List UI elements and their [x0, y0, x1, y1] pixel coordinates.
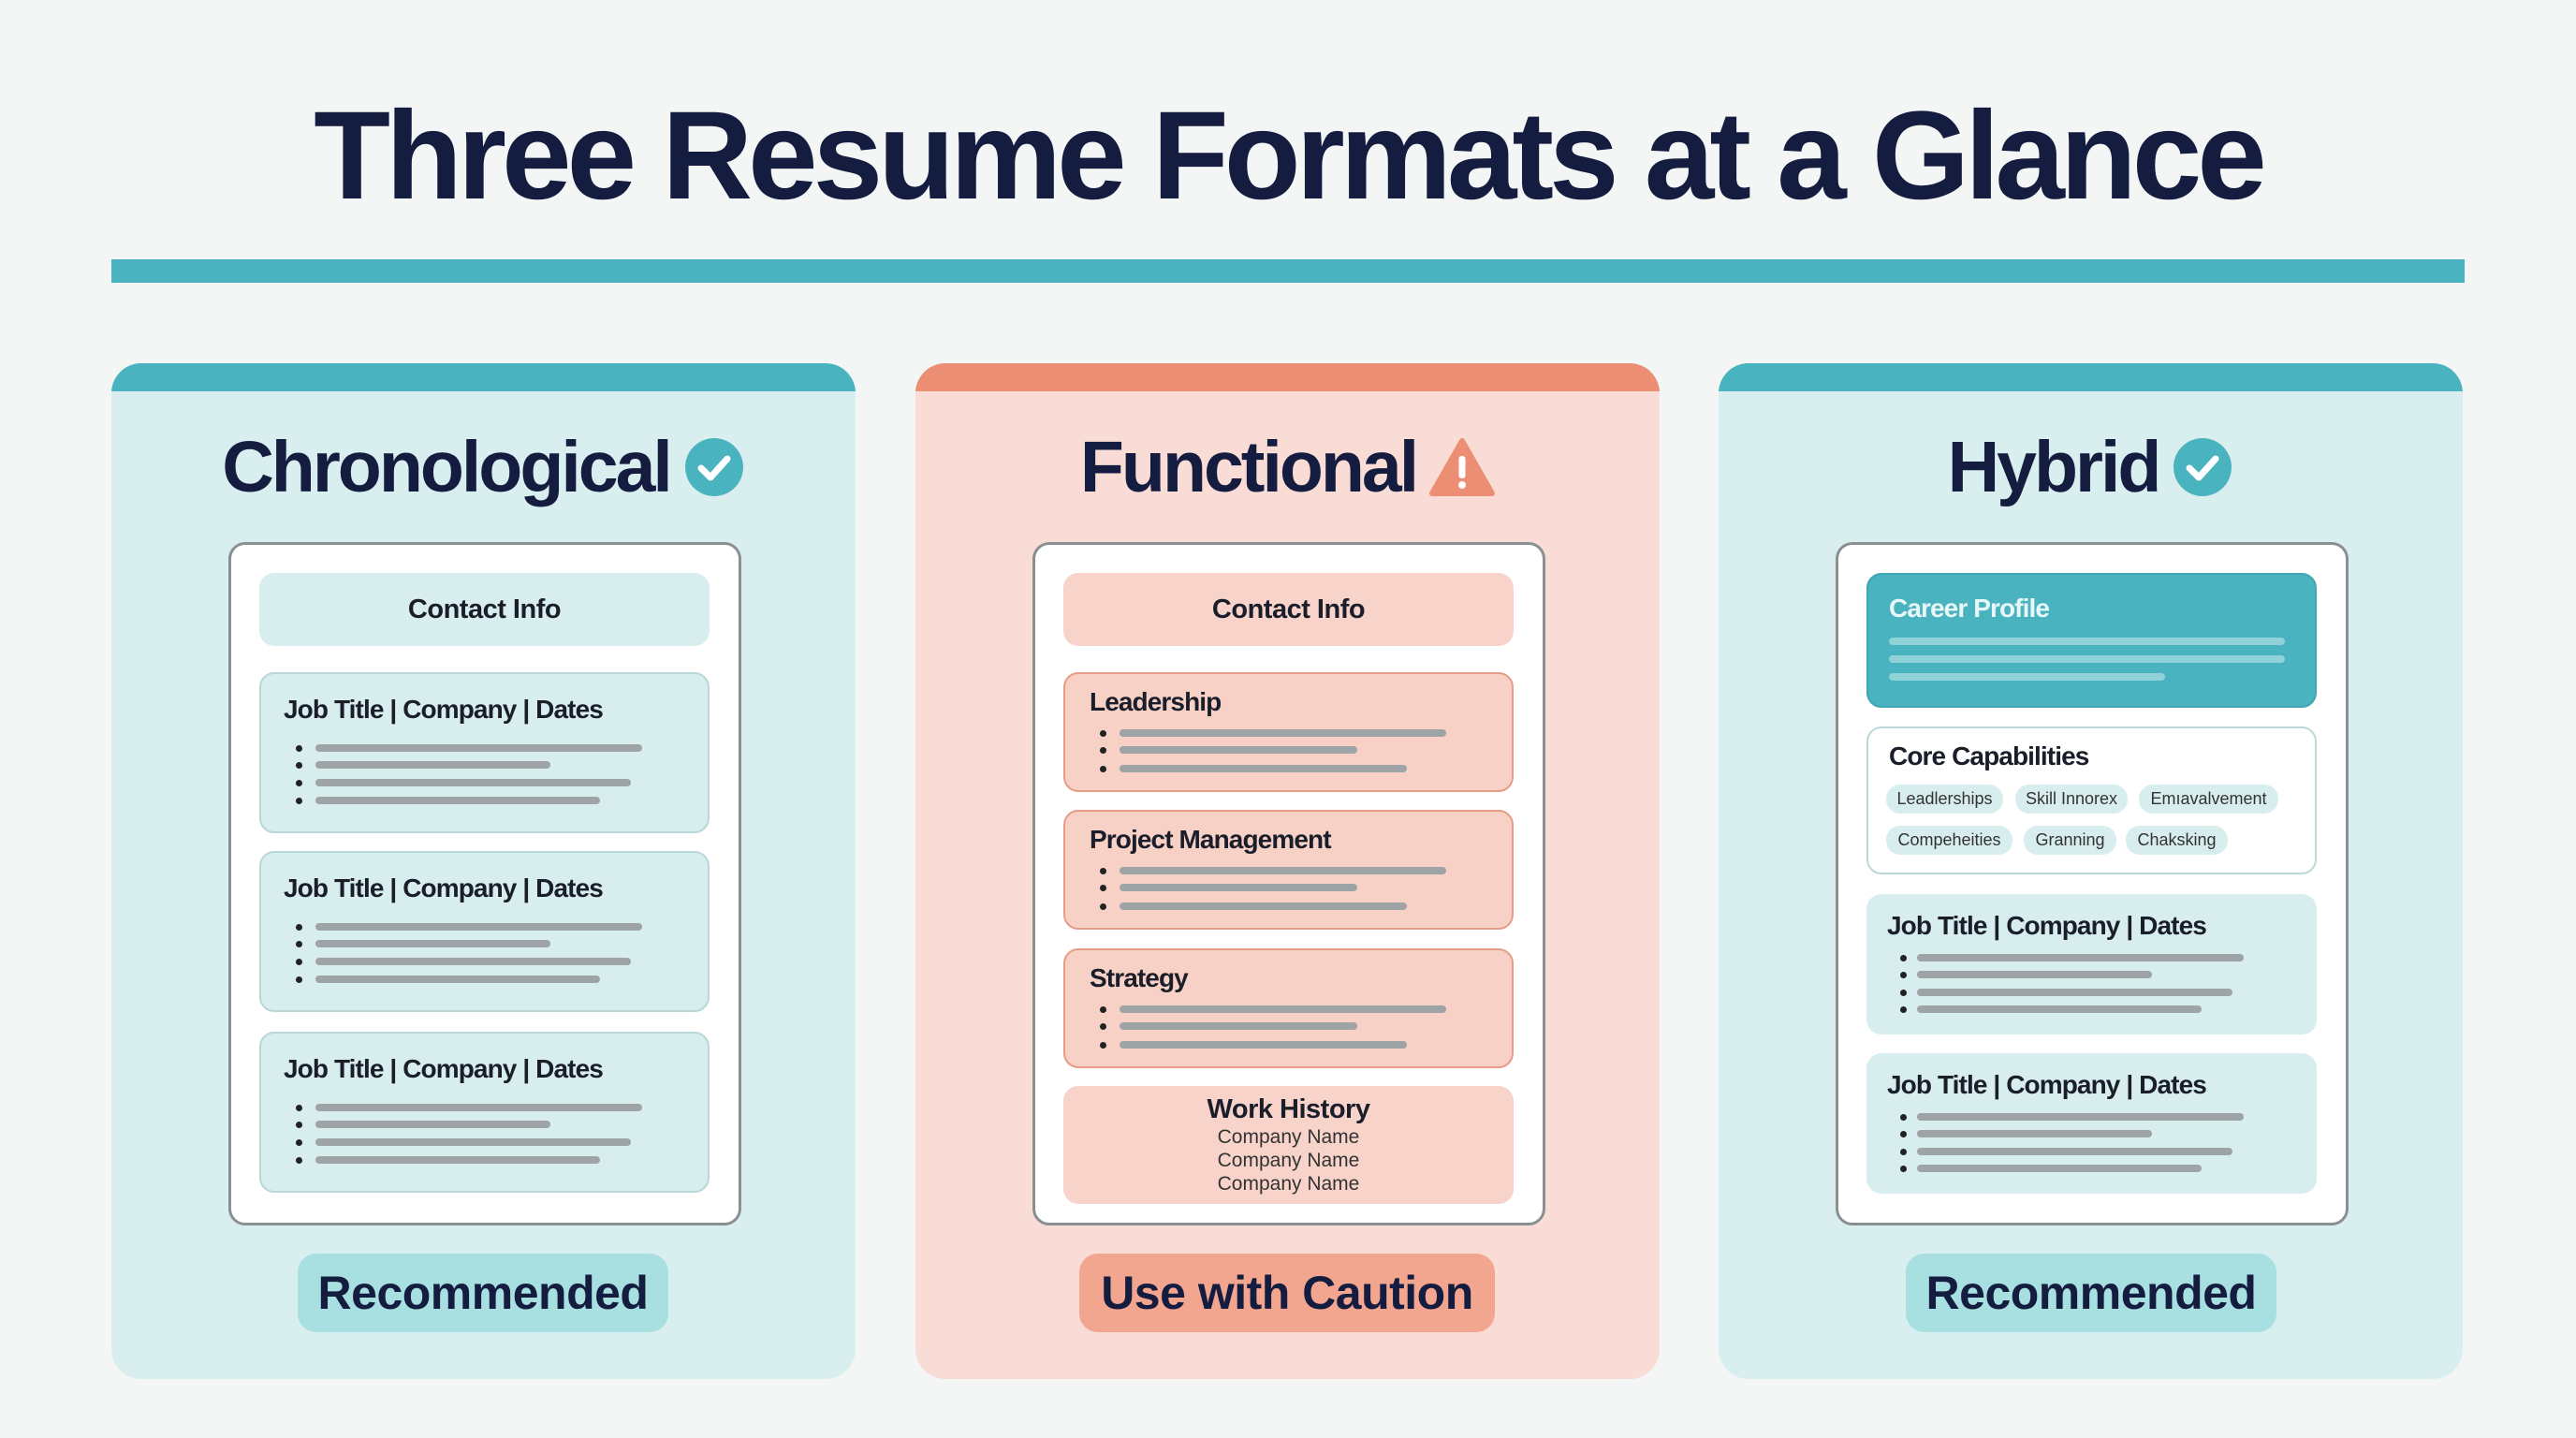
resume document mockup — [1836, 542, 2349, 1225]
panel: hybrid — [1719, 363, 2463, 1379]
panel: chronological — [111, 363, 856, 1379]
heading: chronological: Chronological — [222, 427, 670, 507]
resume document mockup — [1032, 542, 1545, 1225]
section: strategy: Strategy — [1090, 963, 1188, 992]
job entry 3 — [259, 1032, 710, 1193]
section: project management: Project Management — [1090, 825, 1331, 854]
contact info box: Contact Info — [408, 594, 561, 624]
resume document mockup — [228, 542, 741, 1225]
contact info box: Contact Info — [1212, 594, 1365, 624]
core capabilities box: Core Capabilities — [1889, 741, 2088, 770]
section: work history: Work History — [1208, 1094, 1369, 1124]
badge: use with caution — [1079, 1254, 1495, 1332]
job entry 2: Job Title | Company | Dates — [284, 873, 603, 902]
badge: recommended: Recommended — [1926, 1267, 2256, 1319]
badge: recommended: Recommended — [318, 1267, 648, 1319]
heading: hybrid: Hybrid — [1948, 427, 2159, 507]
heading: functional: Functional — [1080, 427, 1416, 507]
badge: recommended — [1906, 1254, 2276, 1332]
core capabilities box: Leadlerships — [1896, 789, 1993, 808]
icon: warning triangle — [1429, 438, 1495, 496]
career profile box: Career Profile — [1889, 594, 2049, 623]
job entry 3: Job Title | Company | Dates — [284, 1054, 603, 1083]
job entry 1: Job Title | Company | Dates — [284, 695, 603, 724]
job entry 2: Job Title | Company | Dates — [1887, 1070, 2206, 1099]
section: project management — [1063, 810, 1514, 930]
core capabilities box: Granning — [2035, 830, 2105, 849]
section: leadership — [1063, 672, 1514, 792]
job entry 2 — [1866, 1053, 2317, 1194]
icon: check badge — [685, 438, 743, 496]
core capabilities box: Emıavalvement — [2150, 789, 2267, 808]
badge: use with caution: Use with Caution — [1101, 1267, 1473, 1319]
core capabilities box: Compeheities — [1897, 830, 2001, 849]
career profile box — [1866, 573, 2317, 708]
badge: recommended — [298, 1254, 668, 1332]
title: Three Resume Formats at a Glance — [314, 86, 2262, 226]
contact info box — [1063, 573, 1514, 646]
skill chips — [1886, 785, 2278, 855]
section: work history: Company Name — [1218, 1126, 1359, 1148]
section: work history: Company Name — [1218, 1173, 1359, 1195]
job entry 1 — [259, 672, 710, 833]
contact info box — [259, 573, 710, 646]
section: work history — [1063, 1086, 1514, 1204]
job entry 1: Job Title | Company | Dates — [1887, 911, 2206, 940]
title underline bar — [111, 259, 2465, 283]
core capabilities box: Chaksking — [2137, 830, 2217, 849]
job entry 1 — [1866, 894, 2317, 1034]
icon: check badge — [2174, 438, 2232, 496]
panel: functional — [915, 363, 1660, 1379]
section: work history: Company Name — [1218, 1150, 1359, 1171]
core capabilities box: Skill Innorex — [2026, 789, 2117, 808]
section: leadership: Leadership — [1090, 687, 1221, 716]
core capabilities box — [1866, 726, 2317, 874]
job entry 2 — [259, 851, 710, 1012]
section: strategy — [1063, 948, 1514, 1068]
